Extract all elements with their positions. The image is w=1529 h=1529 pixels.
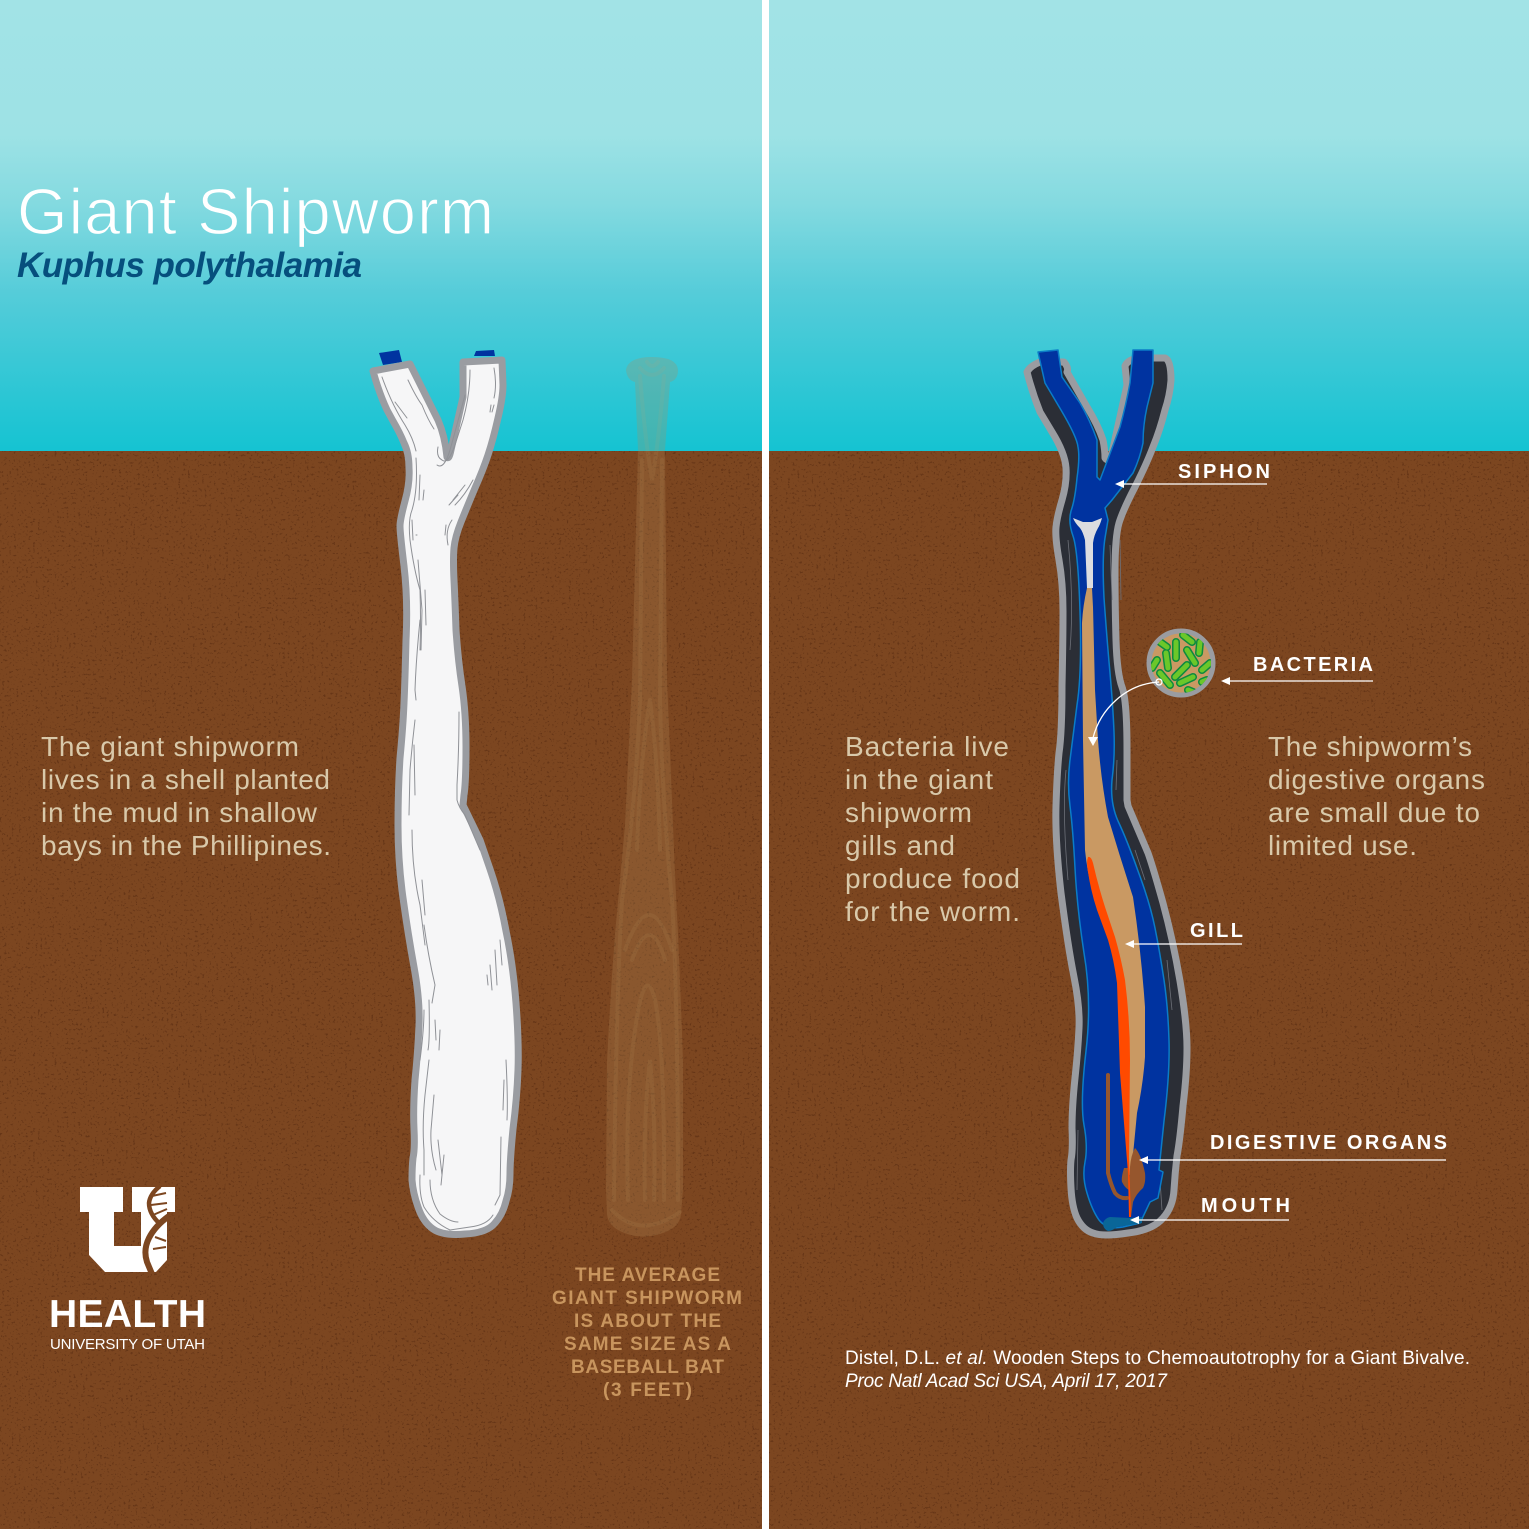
label: gill	[1125, 920, 1243, 948]
text block: digestive organs: The shipworm’s	[1268, 731, 1472, 762]
label: bacteria	[1221, 654, 1373, 685]
text block: digestive organs: are small due to	[1268, 797, 1480, 828]
bat wood grain	[612, 362, 680, 1226]
text block: habitat	[41, 731, 331, 861]
panel: right sky	[769, 0, 1529, 451]
text block: bacteria: Bacteria live	[845, 731, 1009, 762]
callout: bat comparison: GIANT SHIPWORM	[552, 1288, 742, 1309]
illustration: shipworm cross-section	[1027, 350, 1187, 1235]
panel: left mud	[0, 451, 762, 1529]
citation: Proc Natl Acad Sci USA, April 17, 2017	[845, 1371, 1168, 1392]
label: digestive organs	[1139, 1132, 1447, 1164]
logo wordmark: HEALTH	[49, 1293, 206, 1336]
citation: Distel, D.L. et al. Wooden Steps to Chemoautotrophy for a Giant Bivalve.	[845, 1348, 1470, 1369]
text block: bacteria	[845, 731, 1020, 927]
label: siphon	[1115, 461, 1270, 488]
logo: University of Utah Health	[49, 1186, 206, 1353]
worm body	[1038, 350, 1169, 1228]
illustration: baseball bat	[606, 357, 683, 1237]
callout: bat comparison: (3 FEET)	[603, 1380, 692, 1401]
panel: right mud	[769, 451, 1529, 1529]
citation	[845, 1348, 1470, 1392]
title: Giant Shipworm	[17, 175, 494, 248]
digestive organs: stomach	[1122, 1148, 1145, 1217]
shell body	[373, 360, 518, 1234]
text block: digestive organs	[1268, 731, 1485, 861]
mouth	[1103, 1217, 1142, 1231]
text block: habitat: lives in a shell planted	[41, 764, 330, 795]
shell wall	[1027, 358, 1187, 1235]
panel: left sky	[0, 0, 762, 451]
text block: bacteria: for the worm.	[845, 896, 1020, 927]
subtitle: species name: Kuphus polythalamia	[17, 246, 362, 285]
label: mouth	[1130, 1195, 1290, 1224]
label: digestive organs: DIGESTIVE ORGANS	[1210, 1132, 1447, 1154]
text block: bacteria: gills and	[845, 830, 955, 861]
label: gill: GILL	[1190, 920, 1243, 942]
icon: block U with DNA	[80, 1186, 175, 1274]
text block: bacteria: in the giant	[845, 764, 993, 795]
gill	[1082, 588, 1145, 1175]
callout: bat comparison: THE AVERAGE	[575, 1265, 720, 1286]
digestive organs: intestine	[1108, 1075, 1127, 1198]
callout: bat comparison: SAME SIZE AS A	[564, 1334, 731, 1355]
label: bacteria: BACTERIA	[1253, 654, 1373, 676]
icon: bacteria magnified	[1149, 631, 1213, 695]
text block: habitat: The giant shipworm	[41, 731, 299, 762]
callout: bat comparison: IS ABOUT THE	[574, 1311, 721, 1332]
text block: bacteria: shipworm	[845, 797, 972, 828]
text block: bacteria: produce food	[845, 863, 1020, 894]
icon: left siphon tip	[379, 350, 402, 365]
shell inner texture	[1064, 540, 1172, 1210]
gut tube	[1087, 857, 1131, 1217]
text block: habitat: in the mud in shallow	[41, 797, 318, 828]
callout: bat comparison: BASEBALL BAT	[571, 1357, 724, 1378]
text block: digestive organs: digestive organs	[1268, 764, 1485, 795]
icon: right siphon tip	[474, 350, 495, 356]
callout: bat comparison	[552, 1265, 742, 1401]
label: siphon: SIPHON	[1178, 461, 1270, 483]
logo sub-wordmark: UNIVERSITY OF UTAH	[50, 1336, 205, 1353]
text block: digestive organs: limited use.	[1268, 830, 1417, 861]
arrow: bacteria to gill	[1088, 679, 1162, 746]
label: mouth: MOUTH	[1201, 1195, 1290, 1217]
text block: habitat: bays in the Phillipines.	[41, 830, 331, 861]
shell growth lines	[382, 368, 507, 1230]
siphon junction	[1073, 518, 1102, 588]
illustration: shipworm shell exterior	[373, 350, 518, 1234]
